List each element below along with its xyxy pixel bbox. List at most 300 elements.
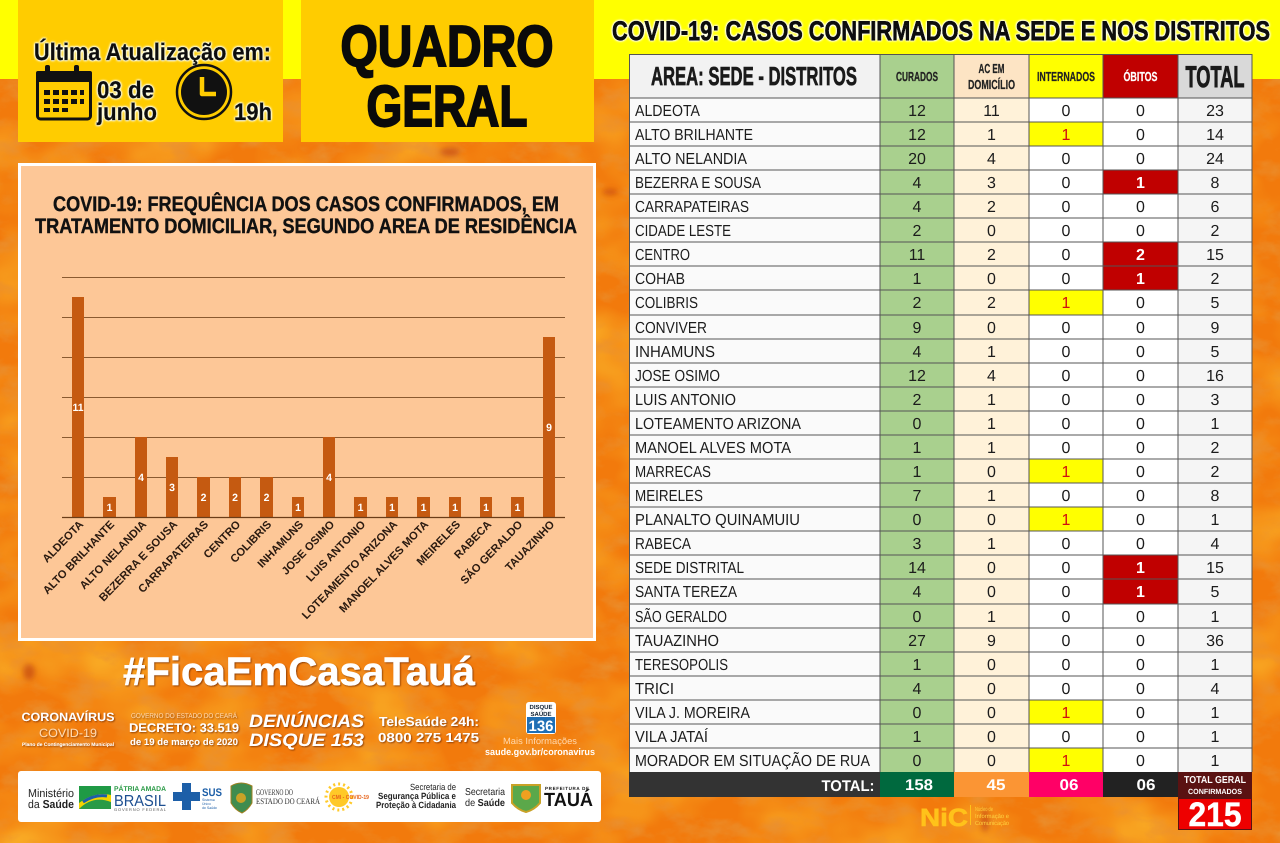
info: website: Mais Informações — [503, 736, 578, 746]
row: Sao Geraldo — [635, 607, 1220, 626]
category labels: JOSE OSIMO — [280, 519, 337, 578]
row: Bezerra e Sousa: 8 — [1211, 175, 1220, 192]
bar values: 1 — [421, 502, 427, 514]
row: Tauazinho: 36 — [1206, 633, 1224, 650]
logo: NIC — [920, 804, 1010, 832]
row: Marrecas: 0 — [1136, 464, 1145, 481]
row: Luis Antonio: 3 — [1211, 392, 1220, 409]
row: Meireles: 1 — [987, 488, 996, 505]
table header: INTERNADOS — [1037, 69, 1095, 84]
row: Morador em situacao de rua: 0 — [987, 753, 996, 770]
bar values: 1 — [107, 502, 113, 514]
bar values: 3 — [169, 482, 175, 494]
row: Morador em situacao de rua: MORADOR EM SITUAÇÃO DE RUA — [635, 751, 870, 770]
row: Marrecas: 1 — [913, 464, 922, 481]
row: Centro: 2 — [987, 247, 996, 264]
panel: logos strip — [18, 771, 601, 822]
bar values — [72, 402, 552, 514]
row: Vila Jatai: 0 — [1062, 729, 1071, 746]
row: Cohab: 0 — [1062, 271, 1071, 288]
bar values: 1 — [452, 502, 458, 514]
row: Conviver — [635, 320, 1220, 337]
row: Marrecas: MARRECAS — [635, 464, 711, 481]
row: Sao Geraldo: 1 — [987, 609, 996, 626]
date text: 03 de — [97, 77, 154, 104]
row: Carrapateiras: 6 — [1211, 199, 1220, 216]
icon: calendar — [36, 65, 92, 119]
row: Conviver: 9 — [1211, 320, 1220, 337]
row: Inhamuns: 1 — [987, 344, 996, 361]
info: decree: de 19 de março de 2020 — [130, 737, 238, 748]
logo: ministerio da saude: Ministério — [28, 788, 74, 800]
row: Colibris — [635, 295, 1220, 312]
info: coronavirus: COVID-19 — [39, 726, 97, 740]
row: Conviver: 0 — [987, 320, 996, 337]
hashtag: #FicaEmCasaTauá — [123, 650, 476, 694]
row: Inhamuns: 0 — [1062, 344, 1071, 361]
row: Sao Geraldo: 0 — [1136, 609, 1145, 626]
row: Carrapateiras: CARRAPATEIRAS — [635, 199, 749, 216]
row: Alto Nelandia: 0 — [1062, 151, 1071, 168]
row: Trici — [635, 681, 1220, 698]
row: Vila J. Moreira: VILA J. MOREIRA — [635, 705, 750, 722]
row: Bezerra e Sousa — [635, 175, 1220, 192]
row: Bezerra e Sousa: 0 — [1062, 175, 1071, 192]
totals row: TOTAL: — [822, 778, 874, 795]
row: Manoel Alves Mota: 1 — [987, 440, 996, 457]
table header: TOTAL — [1186, 61, 1244, 94]
bar values: 2 — [201, 492, 207, 504]
row: Tauazinho: 0 — [1062, 633, 1071, 650]
row: Manoel Alves Mota: 0 — [1136, 440, 1145, 457]
row: Carrapateiras: 0 — [1136, 199, 1145, 216]
logo: NIC: Informação e — [975, 813, 1010, 820]
bar values: 4 — [326, 472, 332, 484]
row: Vila J. Moreira — [635, 705, 1220, 722]
info: website — [485, 736, 595, 758]
row: Marrecas: 1 — [1062, 464, 1071, 481]
panel: last update — [18, 0, 283, 142]
info: denuncias — [249, 711, 364, 750]
logo: SUS: SUS — [202, 787, 222, 799]
row: Manoel Alves Mota: MANOEL ALVES MOTA — [635, 440, 791, 457]
category labels: MEIRELES — [415, 518, 464, 568]
row: Loteamento Arizona: 0 — [913, 416, 922, 433]
row: Centro: CENTRO — [635, 247, 690, 264]
info: decree: DECRETO: 33.519 — [129, 721, 239, 735]
row: Rabeca: 3 — [913, 536, 922, 553]
logo: NIC: NiC — [920, 804, 968, 832]
date text — [96, 77, 157, 126]
row: Alto Nelandia: 4 — [987, 151, 996, 168]
bar values: 1 — [515, 502, 521, 514]
row: Rabeca: RABECA — [635, 536, 691, 553]
row: Jose Osimo — [635, 368, 1224, 385]
logo: secretaria de saude: Secretaria — [465, 787, 505, 798]
total geral box — [1178, 772, 1252, 834]
chart title: TRATAMENTO DOMICILIAR, SEGUNDO AREA DE RESIDÊNCIA — [35, 214, 577, 238]
row: Cohab: 1 — [1136, 271, 1145, 288]
row: Cidade Leste: 2 — [1211, 223, 1220, 240]
row: Tauazinho: 9 — [987, 633, 996, 650]
row: Cidade Leste: 0 — [1136, 223, 1145, 240]
row: Colibris: 1 — [1062, 295, 1071, 312]
row: Cohab: 0 — [987, 271, 996, 288]
panel: bar chart — [20, 164, 594, 640]
logo: patria amada brasil — [79, 784, 167, 812]
table header: CURADOS — [896, 69, 938, 84]
info: telesaude: 0800 275 1475 — [378, 730, 479, 745]
row: Santa Tereza: 1 — [1136, 584, 1145, 601]
bar values: 2 — [264, 492, 270, 504]
row: Manoel Alves Mota: 0 — [1062, 440, 1071, 457]
row: Meireles — [635, 488, 1220, 505]
row: Cidade Leste: 0 — [987, 223, 996, 240]
category labels: LUIS ANTONIO — [304, 519, 368, 584]
category labels: BEZERRA E SOUSA — [97, 519, 180, 604]
row: Teresopolis: 0 — [1062, 657, 1071, 674]
row: Alto Brilhante: 1 — [1062, 127, 1071, 144]
row: Vila Jatai: 1 — [913, 729, 922, 746]
gridlines — [62, 278, 565, 478]
row: Inhamuns: 4 — [913, 344, 922, 361]
row: Morador em situacao de rua: 0 — [1136, 753, 1145, 770]
row: Rabeca: 0 — [1062, 536, 1071, 553]
category labels: TAUAZINHO — [503, 519, 557, 574]
row: Luis Antonio: 0 — [1062, 392, 1071, 409]
row: Teresopolis — [635, 657, 1220, 674]
row: Bezerra e Sousa: BEZERRA E SOUSA — [635, 175, 761, 192]
row: Centro — [635, 247, 1224, 264]
logo: prefeitura de taua: PREFEITURA DE — [545, 786, 589, 791]
row: Alto Nelandia: 0 — [1136, 151, 1145, 168]
category labels: INHAMUNS — [256, 518, 307, 570]
title — [340, 14, 554, 139]
row: Teresopolis: 0 — [987, 657, 996, 674]
row: Vila Jatai — [635, 728, 1220, 746]
row: Aldeota: 12 — [908, 103, 926, 120]
time text: 19h — [234, 99, 272, 126]
row: Centro: 15 — [1206, 247, 1224, 264]
row: Teresopolis: 1 — [1211, 657, 1220, 674]
row: Trici: 0 — [1062, 681, 1071, 698]
table header: DOMICÍLIO — [968, 77, 1015, 92]
logo: sun covid — [326, 784, 370, 810]
row: Inhamuns: 5 — [1211, 344, 1220, 361]
row: Meireles: 7 — [913, 488, 922, 505]
row: Santa Tereza: 0 — [987, 584, 996, 601]
table header: AC EM — [978, 61, 1004, 76]
chart title: COVID-19: FREQUÊNCIA DOS CASOS CONFIRMADOS, EM — [53, 192, 559, 216]
logo: patria amada brasil: GOVERNO FEDERAL — [114, 807, 167, 812]
category labels: ALTO BRILHANTE — [41, 518, 118, 597]
row: Colibris: 2 — [987, 295, 996, 312]
row: Sao Geraldo: SÃO GERALDO — [635, 607, 727, 626]
row: Sao Geraldo: 0 — [1062, 609, 1071, 626]
row: Bezerra e Sousa: 4 — [913, 175, 922, 192]
totals row: 45 — [986, 777, 1006, 794]
logo: governo do estado do ceara: GOVERNO DO — [256, 787, 293, 797]
category labels: COLIBRIS — [228, 518, 275, 566]
row: Luis Antonio: 2 — [913, 392, 922, 409]
row: Conviver: 0 — [1062, 320, 1071, 337]
date text: junho — [96, 99, 157, 126]
row: Sede Distrital: 0 — [1062, 560, 1071, 577]
highlighted cells — [1029, 122, 1178, 772]
bar values: 2 — [232, 492, 238, 504]
row: Sede Distrital: SEDE DISTRITAL — [635, 560, 744, 577]
row: Carrapateiras: 2 — [987, 199, 996, 216]
row: Jose Osimo: 0 — [1062, 368, 1071, 385]
row: Sao Geraldo: 1 — [1211, 609, 1220, 626]
row: Centro: 2 — [1136, 247, 1145, 264]
row: Conviver: CONVIVER — [635, 320, 707, 337]
icon: disque saude 136: 136 — [528, 718, 554, 735]
row: Vila Jatai: 0 — [1136, 729, 1145, 746]
row: Cohab: 2 — [1211, 271, 1220, 288]
row: Centro: 11 — [909, 247, 925, 264]
row: Tauazinho: 27 — [908, 633, 926, 650]
category labels: RABECA — [452, 519, 494, 562]
info: coronavirus — [22, 710, 115, 748]
row: Cidade Leste: 0 — [1062, 223, 1071, 240]
row: Inhamuns: INHAMUNS — [635, 344, 715, 361]
logo: patria amada brasil: BRASIL — [114, 793, 166, 810]
row: Rabeca: 1 — [987, 536, 996, 553]
logo: sun covid: CMI - COVID-19 — [332, 794, 370, 801]
row: Jose Osimo: 0 — [1136, 368, 1145, 385]
panel: Quadro Geral title — [301, 0, 594, 142]
row: Alto Brilhante: 0 — [1136, 127, 1145, 144]
row: Alto Brilhante: 12 — [908, 127, 926, 144]
row: Aldeota: 0 — [1062, 103, 1071, 120]
icon: disque saude 136: SAÚDE — [530, 710, 552, 718]
row: Trici: TRICI — [635, 681, 674, 698]
row: Trici: 4 — [1211, 681, 1220, 698]
row: Vila J. Moreira: 1 — [1062, 705, 1071, 722]
row: Carrapateiras: 0 — [1062, 199, 1071, 216]
icon: disque saude 136 — [526, 702, 556, 735]
category labels: LOTEAMENTO ARIZONA — [300, 519, 400, 622]
row: Luis Antonio: 0 — [1136, 392, 1145, 409]
row: Cohab: COHAB — [635, 271, 685, 288]
row: Morador em situacao de rua — [635, 751, 1220, 770]
bars — [72, 297, 555, 517]
row: Jose Osimo: 12 — [908, 368, 926, 385]
row: Teresopolis: TERESOPOLIS — [635, 657, 728, 674]
info: decree — [129, 711, 239, 748]
category labels: ALTO NELANDIA — [78, 519, 149, 592]
row: Aldeota — [635, 103, 1224, 120]
row: Aldeota: 0 — [1136, 103, 1145, 120]
bar values: 1 — [295, 502, 301, 514]
logo: seguranca publica: Secretaria de — [410, 782, 456, 792]
category labels — [41, 518, 557, 622]
row: Luis Antonio: LUIS ANTONIO — [635, 392, 736, 409]
logo: seguranca publica: Proteção à Cidadania — [376, 800, 457, 810]
row: Trici: 0 — [987, 681, 996, 698]
row: Alto Nelandia: 20 — [908, 151, 926, 168]
row: Sede Distrital: 14 — [908, 560, 926, 577]
info: telesaude — [378, 714, 479, 745]
row: Colibris: 0 — [1136, 295, 1145, 312]
logo: SUS — [173, 783, 222, 810]
logo: patria amada brasil: PÁTRIA AMADA — [114, 784, 166, 793]
row: Luis Antonio: 1 — [987, 392, 996, 409]
row: Morador em situacao de rua: 1 — [1211, 753, 1220, 770]
bar values: 1 — [389, 502, 395, 514]
row: Meireles: MEIRELES — [635, 488, 703, 505]
row: Teresopolis: 1 — [913, 657, 922, 674]
row: Rabeca — [635, 536, 1220, 553]
row: Morador em situacao de rua: 1 — [1062, 753, 1071, 770]
row: Santa Tereza: SANTA TEREZA — [635, 584, 737, 601]
panel: data table — [629, 54, 1252, 834]
table header: ÓBITOS — [1124, 69, 1158, 84]
title: GERAL — [366, 74, 528, 139]
bar values: 11 — [72, 402, 84, 414]
row: Trici: 0 — [1136, 681, 1145, 698]
logo: secretaria de saude — [465, 787, 505, 809]
bar values: 4 — [138, 472, 144, 484]
row: Tauazinho: 0 — [1136, 633, 1145, 650]
row: Cidade Leste — [635, 223, 1220, 240]
row: Planalto Quinamuiu: 0 — [1136, 512, 1145, 529]
row: Alto Brilhante: ALTO BRILHANTE — [635, 127, 753, 144]
column fills — [629, 98, 1252, 772]
icon: clock — [177, 65, 231, 119]
row: Vila Jatai: VILA JATAÍ — [635, 728, 709, 746]
row: Planalto Quinamuiu: 0 — [987, 512, 996, 529]
row: Sede Distrital — [635, 560, 1224, 577]
row: Manoel Alves Mota: 1 — [913, 440, 922, 457]
row: Meireles: 8 — [1211, 488, 1220, 505]
row: Loteamento Arizona — [635, 416, 1220, 433]
row: Vila J. Moreira: 0 — [913, 705, 922, 722]
logo: SUS: Único — [202, 801, 211, 806]
category labels: CARRAPATEIRAS — [136, 518, 212, 596]
info: denuncias: DENÚNCIAS — [249, 711, 364, 731]
table header: AREA: SEDE - DISTRITOS — [651, 61, 857, 91]
info: telesaude: TeleSaúde 24h: — [379, 714, 479, 729]
row: Rabeca: 4 — [1211, 536, 1220, 553]
row: Bezerra e Sousa: 1 — [1136, 175, 1145, 192]
logo: secretaria de saude: de Saúde — [465, 798, 505, 809]
row: Jose Osimo: 16 — [1206, 368, 1224, 385]
bar values: 9 — [546, 422, 552, 434]
bar values: 1 — [358, 502, 364, 514]
logo: seguranca publica: Segurança Pública e — [378, 791, 456, 801]
row: Marrecas: 0 — [987, 464, 996, 481]
row: Inhamuns — [635, 344, 1220, 361]
row: Cohab — [635, 271, 1220, 288]
logo: SUS: Sistema — [202, 798, 215, 802]
row: Aldeota: ALDEOTA — [635, 103, 700, 120]
baseline — [62, 516, 565, 518]
logo: prefeitura de taua: TAUÁ — [544, 789, 593, 811]
row: Loteamento Arizona: LOTEAMENTO ARIZONA — [635, 416, 801, 433]
total geral box: 215 — [1188, 796, 1242, 834]
row: Colibris: 2 — [913, 295, 922, 312]
row: Santa Tereza — [635, 584, 1220, 601]
row: Alto Nelandia — [635, 151, 1224, 168]
row: Alto Nelandia: ALTO NELANDIA — [635, 151, 747, 168]
row: Cidade Leste: 2 — [913, 223, 922, 240]
info: denuncias: DISQUE 153 — [249, 730, 364, 750]
row: Planalto Quinamuiu: 1 — [1062, 512, 1071, 529]
totals row: 06 — [1060, 777, 1079, 794]
total geral box: TOTAL GERAL — [1184, 775, 1246, 786]
row: Rabeca: 0 — [1136, 536, 1145, 553]
row: Colibris: COLIBRIS — [635, 295, 698, 312]
row: Santa Tereza: 0 — [1062, 584, 1071, 601]
row: Loteamento Arizona: 1 — [1211, 416, 1220, 433]
row: Marrecas — [635, 464, 1220, 481]
row: Santa Tereza: 5 — [1211, 584, 1220, 601]
row: Colibris: 5 — [1211, 295, 1220, 312]
logo: taua crest — [512, 785, 540, 812]
row: Planalto Quinamuiu: 0 — [913, 512, 922, 529]
info: coronavirus: Plano de Contingenciamento Municipal — [22, 742, 115, 748]
totals row: 06 — [1136, 777, 1156, 794]
row: Planalto Quinamuiu — [635, 512, 1220, 529]
row: Teresopolis: 0 — [1136, 657, 1145, 674]
row: Vila J. Moreira: 0 — [1136, 705, 1145, 722]
category labels: SÃO GERALDO — [458, 518, 525, 587]
row: Alto Brilhante: 1 — [987, 127, 996, 144]
bar values: 1 — [483, 502, 489, 514]
row: Santa Tereza: 4 — [913, 584, 922, 601]
title: QUADRO — [340, 14, 554, 79]
totals row — [629, 772, 1178, 797]
row: Loteamento Arizona: 0 — [1062, 416, 1071, 433]
row: Trici: 4 — [913, 681, 922, 698]
row: Conviver: 9 — [913, 320, 922, 337]
row: Sao Geraldo: 0 — [913, 609, 922, 626]
row: Planalto Quinamuiu: PLANALTO QUINAMUIU — [635, 512, 800, 529]
logo: NIC: Comunicação — [975, 820, 1010, 827]
row: Alto Brilhante: 14 — [1206, 127, 1224, 144]
row: Meireles: 0 — [1136, 488, 1145, 505]
info: coronavirus: CORONAVÍRUS — [22, 710, 114, 724]
logo: SUS: de Saúde — [202, 806, 217, 810]
row: Alto Nelandia: 24 — [1206, 151, 1224, 168]
icon: disque saude 136: DISQUE — [529, 704, 553, 711]
row: Cidade Leste: CIDADE LESTE — [635, 223, 731, 240]
logo: seguranca publica — [376, 782, 457, 810]
row: Alto Brilhante — [635, 127, 1224, 144]
logo: governo do estado do ceara — [231, 783, 321, 813]
row: Manoel Alves Mota: 2 — [1211, 440, 1220, 457]
logo: NIC: Núcleo de — [975, 806, 993, 813]
row: Vila Jatai: 0 — [987, 729, 996, 746]
row: Marrecas: 2 — [1211, 464, 1220, 481]
row: Aldeota: 11 — [983, 103, 1000, 120]
logo: ministerio da saude: da Saúde — [28, 799, 74, 811]
row: Loteamento Arizona: 0 — [1136, 416, 1145, 433]
row: Sede Distrital: 0 — [987, 560, 996, 577]
row: Cohab: 1 — [913, 271, 922, 288]
chart title — [35, 192, 577, 238]
row: Tauazinho: TAUAZINHO — [635, 633, 719, 650]
info: website: saude.gov.br/coronavirus — [485, 747, 595, 758]
category labels: MANOEL ALVES MOTA — [337, 519, 431, 615]
info: decree: GOVERNO DO ESTADO DO CEARÁ — [131, 711, 237, 720]
row: Carrapateiras — [635, 199, 1220, 216]
row: Bezerra e Sousa: 3 — [987, 175, 996, 192]
row: Meireles: 0 — [1062, 488, 1071, 505]
top yellow band — [0, 0, 1280, 79]
